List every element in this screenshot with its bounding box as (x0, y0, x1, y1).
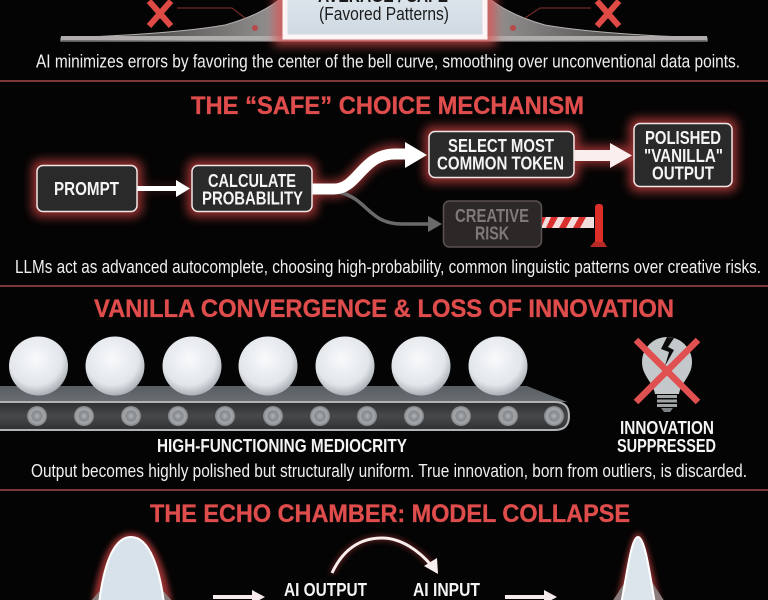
box: prompt (37, 166, 137, 212)
label: AI input: AI INPUT (413, 580, 480, 600)
box: polished vanilla output: OUTPUT (652, 164, 714, 184)
favored center box (285, 0, 485, 37)
label: innovation suppressed: SUPPRESSED (617, 436, 716, 456)
box: polished vanilla output: "VANILLA" (644, 146, 723, 166)
box: prompt: PROMPT (54, 179, 119, 199)
box: calculate probability: CALCULATE (208, 171, 296, 191)
center highlight glow (274, 0, 496, 46)
arrow: prompt to calculate (137, 180, 190, 197)
box: polished vanilla output (634, 124, 732, 186)
heading: echo chamber: THE ECHO CHAMBER: MODEL COLLAPSE (150, 500, 630, 528)
belt surface (0, 386, 567, 402)
panel: echo chamber diagram (90, 533, 665, 600)
uniform spheres (9, 336, 528, 396)
right outlier rejected (510, 1, 619, 31)
panel: bell curve favoring the average (61, 0, 707, 46)
box: select most common token: COMMON TOKEN (437, 154, 564, 174)
chart: collapsed narrow distribution (612, 533, 665, 600)
arrow: feedback arc (332, 538, 438, 574)
label: innovation suppressed (617, 418, 716, 456)
heading: safe choice mechanism: THE “SAFE” CHOICE MECHANISM (191, 92, 584, 120)
arrow: distribution to loop (213, 590, 265, 600)
box: creative risk: RISK (475, 224, 509, 244)
left outlier rejected (149, 1, 258, 31)
chart: original wide distribution (90, 533, 173, 600)
label: innovation suppressed: INNOVATION (620, 418, 714, 438)
box: creative risk (444, 201, 542, 247)
box: calculate probability: PROBABILITY (202, 188, 303, 208)
box: select most common token: SELECT MOST (448, 136, 554, 156)
box glows (32, 118, 737, 217)
panel: conveyor belt with identical spheres (0, 336, 569, 430)
box: polished vanilla output: POLISHED (645, 128, 721, 148)
label: high-functioning mediocrity: HIGH-FUNCTIONING MEDIOCRITY (157, 436, 407, 456)
heading: vanilla convergence: VANILLA CONVERGENCE & LOSS OF INNOVATION (94, 295, 674, 323)
rollers (0, 406, 564, 426)
box: select most common token (429, 132, 574, 178)
belt frame (0, 402, 569, 430)
icon: road barrier (541, 204, 607, 247)
icon: crossed-out broken light bulb (636, 337, 698, 412)
arrow: calculate to select (312, 142, 427, 189)
arrow: select to output (574, 143, 632, 168)
box: creative risk: CREATIVE (455, 206, 529, 226)
bell curve tails (61, 0, 707, 41)
grey rejected path (338, 192, 442, 232)
box: calculate probability (192, 166, 312, 212)
panel: safe choice flow diagram (32, 118, 737, 247)
arrow: loop to collapsed distribution (505, 590, 557, 600)
favored center box: (Favored Patterns) (319, 4, 449, 24)
label: AI output: AI OUTPUT (284, 580, 367, 600)
